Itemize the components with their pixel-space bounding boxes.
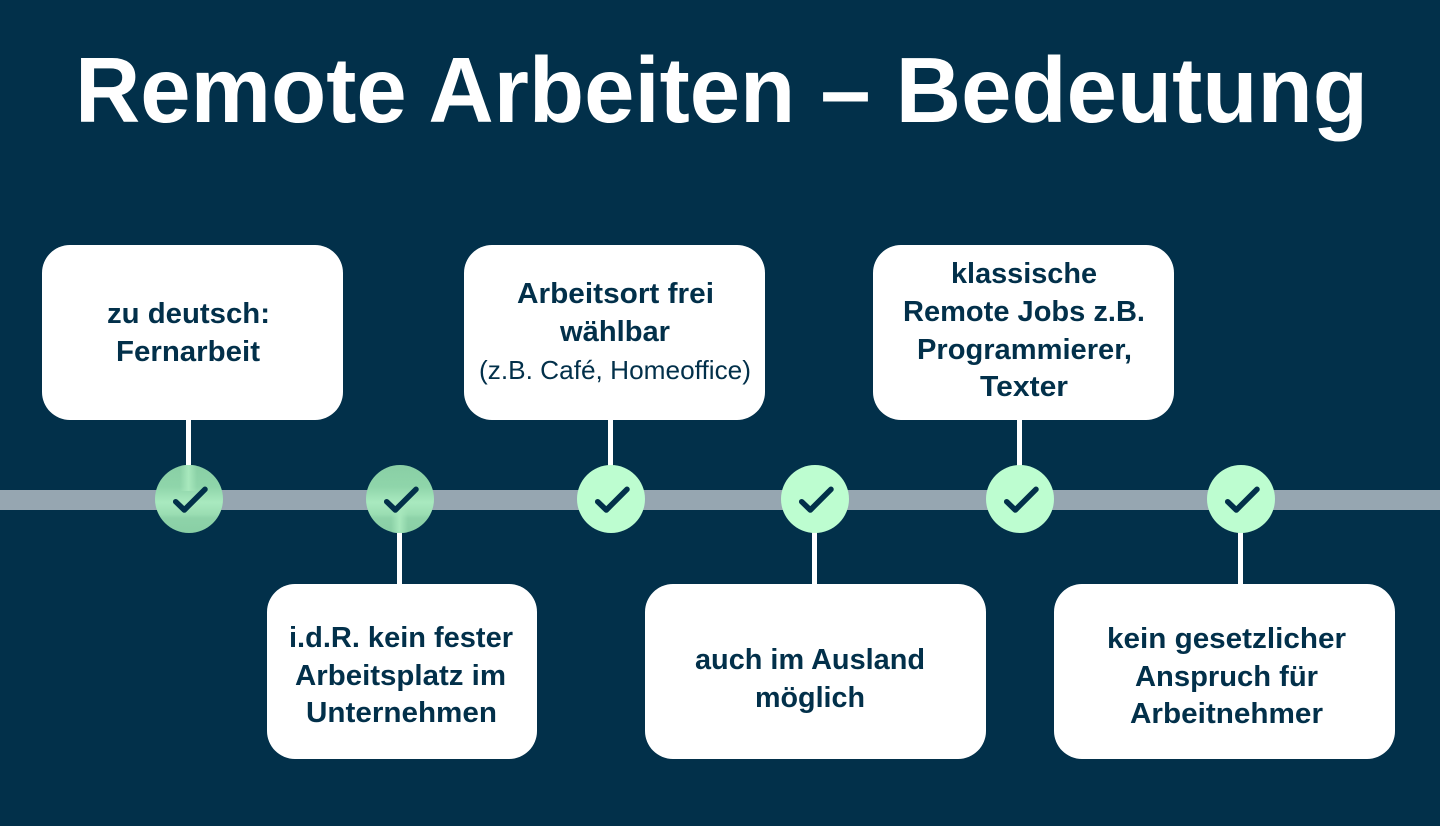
card: Arbeitsort: wählbar [559,316,670,348]
timeline bar [0,490,1440,510]
card: zu deutsch: Fernarbeit [116,336,261,368]
card: zu deutsch: zu deutsch: [107,298,270,330]
card: kein fester Arbeitsplatz [267,584,537,759]
connector 6 [1238,532,1243,584]
marker 2: check [366,465,434,533]
card: kein fester Arbeitsplatz: Unternehmen [306,697,497,729]
title: Remote Arbeiten – Bedeutung [75,38,1368,142]
card: klassische Remote Jobs [873,245,1174,420]
marker 4: check [781,465,849,533]
connector 1 [186,420,191,466]
card: kein fester Arbeitsplatz: Arbeitsplatz im [295,660,506,692]
card: klassische Remote Jobs: Programmierer, [917,334,1132,366]
card: auch im Ausland: auch im Ausland [695,644,925,676]
card: Arbeitsort [464,245,765,420]
marker 3: check [577,465,645,533]
connector 4 [812,532,817,584]
card: klassische Remote Jobs: Texter [980,371,1068,403]
connector 3 [608,420,613,466]
card: kein gesetzlicher Anspruch [1054,584,1395,759]
marker 1: check [155,465,223,533]
connector 5 [1017,420,1022,466]
card: Arbeitsort: Arbeitsort frei [517,278,714,310]
card: auch im Ausland [645,584,986,759]
card: klassische Remote Jobs: klassische [951,258,1097,290]
marker 5: check [986,465,1054,533]
card: klassische Remote Jobs: Remote Jobs z.B. [903,296,1145,328]
card: kein gesetzlicher Anspruch: kein gesetzlicher [1107,623,1346,655]
card: auch im Ausland: möglich [755,682,865,714]
card: Arbeitsort: (z.B. Café, Homeoffice) [479,355,751,385]
card: zu deutsch [42,245,343,420]
card: kein fester Arbeitsplatz: i.d.R. kein fester [289,622,513,654]
marker 6: check [1207,465,1275,533]
card: kein gesetzlicher Anspruch: Anspruch für [1135,661,1318,693]
connector 2 [397,532,402,584]
card: kein gesetzlicher Anspruch: Arbeitnehmer [1130,698,1323,730]
